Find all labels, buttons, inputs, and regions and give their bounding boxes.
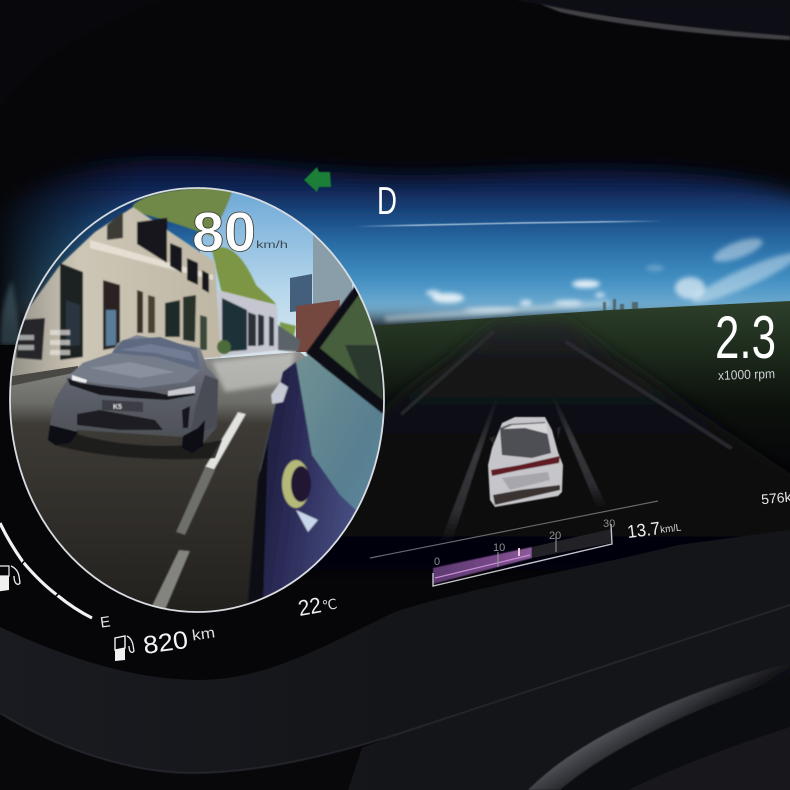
range readout: km (191, 624, 216, 644)
gauge labels: 10 (493, 542, 505, 554)
circle rim (10, 188, 384, 612)
speed readout: 80 (192, 200, 256, 263)
gauge labels (434, 518, 615, 568)
road (0, 352, 310, 620)
intake (77, 410, 163, 430)
top-right trim reflection (514, 0, 790, 37)
outside temperature (296, 590, 339, 621)
left fade to black (0, 140, 140, 345)
lane markings (205, 412, 246, 470)
rear car on road (488, 417, 563, 507)
range readout (115, 624, 216, 661)
main building (0, 207, 231, 385)
windows (107, 212, 123, 240)
icon: green direction arrow (304, 167, 331, 192)
row of shops (218, 290, 300, 357)
fuel economy value: 13.7 (626, 518, 661, 542)
display: ground and road (0, 301, 790, 645)
speed readout: km/h (256, 240, 288, 251)
plate (102, 400, 143, 412)
own car window (248, 286, 383, 603)
display: skyline (603, 299, 638, 311)
hood (67, 360, 199, 388)
outside temperature: 22 (296, 592, 323, 621)
RPM readout: x1000 rpm (718, 366, 775, 383)
fuel efficiency gauge (370, 501, 658, 586)
fuel gauge arc: E (99, 613, 111, 632)
gear indicator D: D (377, 180, 397, 223)
horizon glow (385, 300, 610, 322)
horizon line (355, 221, 665, 226)
city sky (200, 192, 354, 365)
gauge labels: 30 (603, 518, 615, 530)
outside temperature: ℃ (321, 595, 338, 614)
bottom-left dark recess (0, 713, 395, 790)
front car: K5 (113, 404, 122, 411)
gauge labels: 20 (549, 530, 561, 542)
front car (48, 335, 222, 459)
gauge labels: 0 (434, 556, 440, 568)
left haze (0, 280, 22, 345)
icon: fuel pump (115, 636, 134, 661)
own car mirror (271, 382, 288, 404)
camera view circle (9, 187, 385, 613)
speed readout (192, 200, 288, 263)
trees (133, 186, 296, 348)
lane line right (551, 396, 606, 508)
range readout: 820 (141, 626, 190, 660)
lower dashboard panel (0, 530, 790, 790)
own car body (259, 354, 383, 510)
fuel economy value: km/L (660, 522, 682, 536)
lane line left (441, 396, 499, 542)
steering-wheel rim streak (528, 663, 790, 790)
far buildings (290, 274, 312, 312)
headlights (72, 375, 87, 383)
display: sky (0, 140, 790, 360)
fuel gauge arc (0, 523, 111, 632)
wheels (48, 425, 78, 445)
icon: fuel pump small left (0, 566, 20, 592)
clouds (426, 234, 790, 313)
windshield (112, 337, 200, 370)
fuel economy value (626, 515, 683, 542)
grille (67, 378, 195, 400)
